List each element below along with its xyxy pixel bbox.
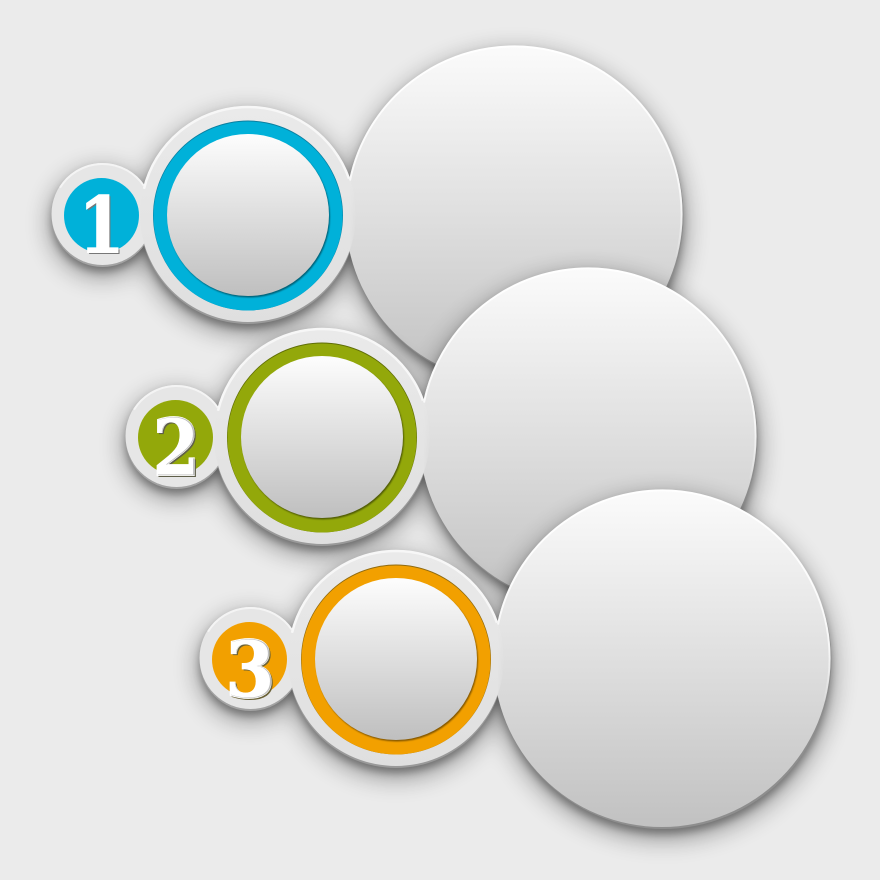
- step 2 number badge: [138, 400, 213, 496]
- step 1 number badge: 1: [78, 180, 125, 272]
- step 3 number badge: [212, 622, 287, 717]
- step 2 group: green: [126, 268, 758, 607]
- step 2 number badge: 2: [153, 402, 200, 494]
- step 3 rim highlights: [208, 490, 830, 701]
- step 3 silhouette with shadow: [200, 490, 832, 829]
- step 3 ring: [301, 564, 491, 754]
- step 2 rim highlights: [134, 268, 756, 479]
- step 3 number badge: 3: [226, 626, 274, 715]
- step 3 number badge: 3: [226, 624, 275, 716]
- step 1 number badge: 1: [80, 182, 126, 273]
- step 1 number badge: [64, 178, 139, 273]
- step 1 ring: [153, 120, 343, 310]
- step 3 number badge: 3: [227, 626, 277, 717]
- step 2 ring: [227, 342, 417, 532]
- step 2 number badge: 2: [153, 403, 199, 493]
- step 3 group: orange: [200, 490, 832, 829]
- step 1 group: blue: [52, 46, 684, 385]
- step 1 rim highlights: [60, 46, 682, 257]
- step 3 number badge: 3: [226, 624, 276, 716]
- step 1 silhouette with shadow: [52, 46, 684, 385]
- step 2 number badge: 2: [154, 404, 202, 496]
- step 2 silhouette with shadow: [126, 268, 758, 607]
- step 2 number badge: 2: [153, 402, 201, 494]
